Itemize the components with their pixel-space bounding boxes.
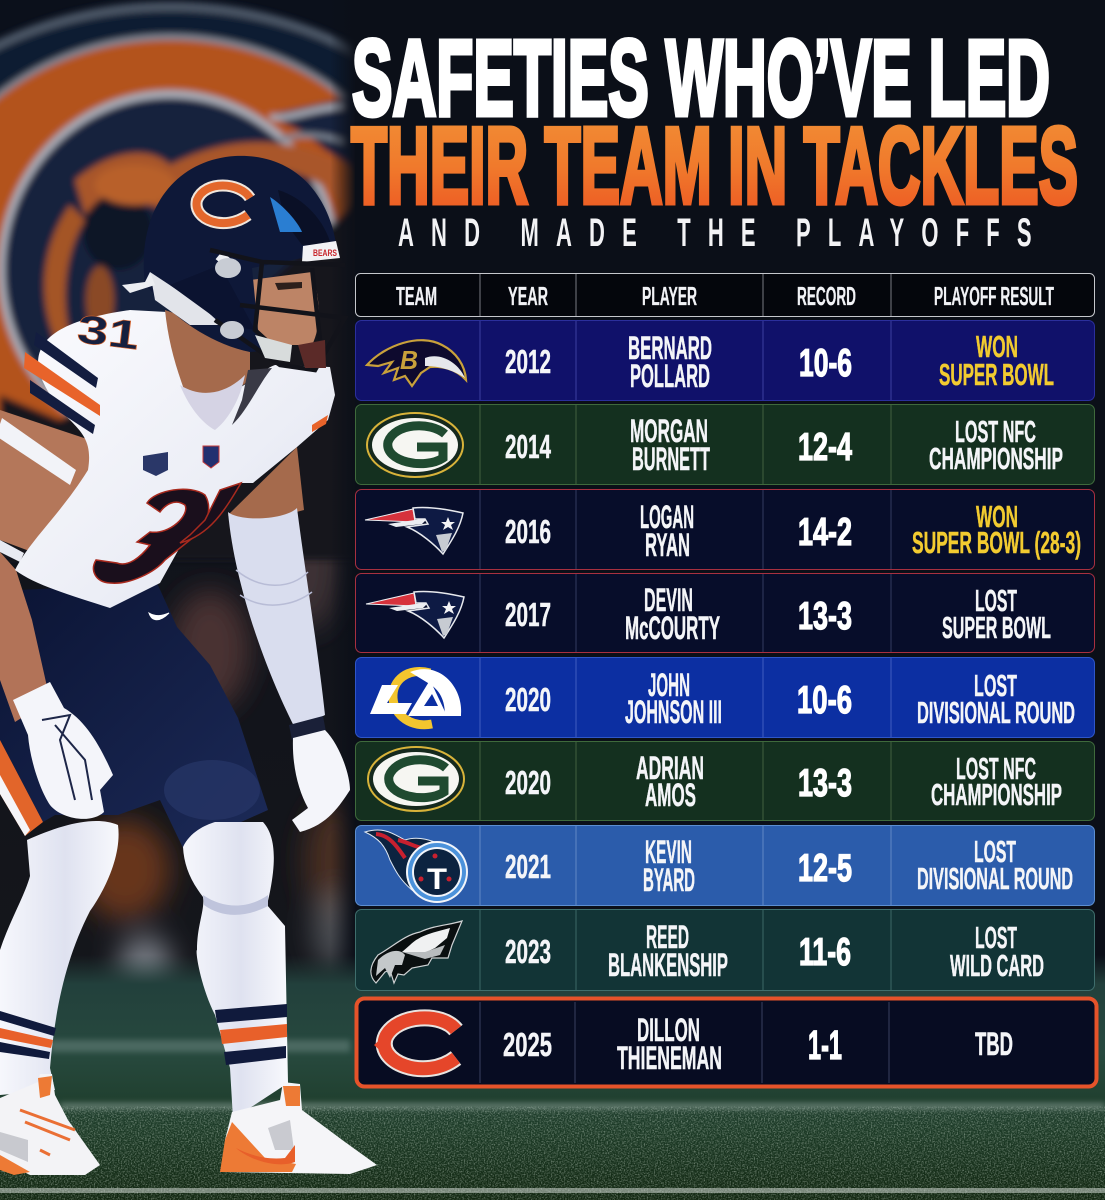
row: Titans 2021: 2021 bbox=[505, 848, 551, 885]
table header: YEAR bbox=[508, 281, 548, 311]
upper arm skin bbox=[0, 410, 92, 555]
icon: Packers logo bbox=[367, 413, 463, 477]
row: Eagles 2023: 11-6 bbox=[799, 931, 851, 974]
playoff result bbox=[950, 920, 1044, 983]
player: Bears safety number 31 bbox=[0, 156, 377, 1175]
playoff result bbox=[929, 414, 1063, 476]
row: Rams 2020 bbox=[356, 658, 1094, 738]
icon: Rams logo bbox=[370, 669, 461, 725]
background: blurred bears logo bbox=[0, 0, 505, 560]
right knee and sock bbox=[183, 822, 288, 1119]
row: Packers 2020 bbox=[356, 742, 1094, 820]
icon: Ravens logo bbox=[367, 340, 466, 386]
row: Titans 2021: 12-5 bbox=[798, 847, 852, 890]
table header bbox=[356, 274, 1094, 316]
playoff result: WON bbox=[976, 329, 1018, 364]
row: Patriots 2016 bbox=[356, 490, 1094, 570]
player name: JOHNSON III bbox=[625, 694, 722, 730]
row: Packers 2014: 2014 bbox=[505, 428, 551, 465]
pants side stripe bbox=[0, 740, 43, 836]
row: Rams 2020: 2020 bbox=[505, 681, 551, 718]
row: Patriots 2016: LOGAN bbox=[640, 499, 694, 535]
BEARS visor tag: BEARS bbox=[313, 248, 337, 258]
fade behind title and table bbox=[330, 0, 356, 985]
icon: Packers logo bbox=[368, 747, 464, 811]
subtitle: AND MADE THE PLAYOFFS bbox=[398, 210, 1032, 255]
table header: PLAYER bbox=[642, 281, 697, 311]
BEARS visor tag bbox=[302, 241, 340, 262]
sleeve stripes bbox=[34, 332, 98, 388]
right cleat bbox=[222, 1082, 377, 1174]
playoff result bbox=[942, 583, 1051, 645]
playoff result: LOST bbox=[975, 583, 1017, 618]
left knee and sock bbox=[0, 821, 119, 1095]
row: Ravens 2012: 10-6 bbox=[799, 342, 852, 385]
NFL shield badge bbox=[203, 446, 219, 468]
player name: AMOS bbox=[645, 777, 696, 813]
row: Eagles 2023 bbox=[356, 910, 1094, 990]
player name bbox=[643, 834, 695, 898]
wrist band bbox=[0, 540, 24, 562]
helmet shell bbox=[144, 156, 336, 352]
shoulder number: 31 bbox=[75, 307, 142, 358]
row: Titans 2021: BYARD bbox=[643, 862, 695, 898]
shoulder number behind mask bbox=[298, 340, 326, 368]
pants swoosh bbox=[149, 613, 169, 620]
facemask bbox=[210, 250, 345, 370]
chest number bbox=[94, 483, 241, 583]
right wrist band bbox=[289, 716, 326, 740]
row: Packers 2020: 13-3 bbox=[798, 762, 852, 805]
bear fur bbox=[75, 142, 340, 215]
undershirt bbox=[180, 375, 245, 430]
player name bbox=[630, 413, 710, 477]
playoff result bbox=[917, 834, 1073, 896]
playoff result: LOST bbox=[974, 834, 1016, 869]
player name bbox=[608, 919, 728, 983]
table header: TEAM bbox=[396, 281, 437, 311]
helmet jaw bbox=[170, 265, 255, 330]
playoff result: LOST bbox=[974, 668, 1017, 703]
player name: BERNARD bbox=[628, 330, 712, 366]
icon: Patriots logo bbox=[365, 507, 463, 554]
player name: REED bbox=[646, 919, 689, 955]
row: Titans 2021 bbox=[356, 826, 1094, 906]
neck bbox=[165, 310, 250, 400]
playoff result bbox=[939, 329, 1054, 392]
player name bbox=[636, 750, 704, 813]
football field turf bbox=[0, 955, 1105, 1200]
player name bbox=[628, 330, 712, 394]
player name: KEVIN bbox=[645, 834, 692, 870]
player name: BURNETT bbox=[632, 441, 710, 477]
forearm skin bbox=[0, 552, 50, 722]
player name bbox=[617, 1012, 722, 1076]
player name: DEVIN bbox=[644, 582, 693, 618]
ear strap bbox=[122, 272, 155, 293]
left glove bbox=[13, 682, 113, 819]
chin strap bbox=[255, 335, 292, 362]
left cleat bbox=[0, 1074, 100, 1175]
table header: RECORD bbox=[797, 281, 856, 311]
face bbox=[245, 272, 319, 345]
playoff result bbox=[931, 751, 1062, 812]
jersey bbox=[15, 310, 335, 608]
row: Packers 2014: 12-4 bbox=[798, 426, 852, 469]
row: Ravens 2012: 2012 bbox=[505, 343, 551, 380]
playoff result bbox=[912, 499, 1081, 560]
right glove bbox=[292, 730, 350, 832]
right sleeve stripe bbox=[312, 415, 328, 432]
helmet side detail bbox=[150, 272, 222, 325]
icon: Eagles logo bbox=[371, 921, 462, 983]
player name: THIENEMAN bbox=[617, 1040, 722, 1076]
icon: Titans logo: T bbox=[427, 863, 447, 896]
row: Patriots 2016: 14-2 bbox=[798, 511, 852, 554]
row: Bears 2025 highlighted: 1-1 bbox=[808, 1022, 842, 1068]
lower logo hidden in crowd bbox=[0, 200, 360, 560]
bicep band bbox=[0, 418, 76, 485]
row: Patriots 2016: 2016 bbox=[505, 513, 551, 550]
icon: Ravens logo: B bbox=[400, 345, 418, 375]
player name: JOHN bbox=[648, 667, 690, 703]
row: Patriots 2017: 2017 bbox=[505, 596, 551, 633]
icon: Bears logo bbox=[374, 1018, 456, 1069]
icon: Titans logo bbox=[365, 830, 468, 903]
row: Bears 2025 highlighted: 2025 bbox=[503, 1026, 552, 1063]
title bbox=[351, 17, 1078, 255]
row: Patriots 2017 bbox=[356, 574, 1094, 652]
row: Packers 2020: 2020 bbox=[505, 764, 551, 801]
row: Eagles 2023: 2023 bbox=[505, 933, 551, 970]
far arm skin bbox=[228, 447, 304, 528]
helmet C logo bbox=[196, 186, 250, 223]
row: Bears 2025 highlighted bbox=[356, 998, 1096, 1086]
player name: BLANKENSHIP bbox=[608, 947, 728, 983]
player name bbox=[625, 667, 722, 730]
playoff result: WON bbox=[976, 499, 1018, 534]
C notch bbox=[270, 95, 360, 170]
row: Ravens 2012 bbox=[356, 320, 1094, 400]
row: Rams 2020: 10-6 bbox=[797, 679, 852, 722]
arm sleeve bbox=[228, 508, 325, 730]
icon: Patriots logo bbox=[366, 591, 464, 638]
player name: McCOURTY bbox=[625, 610, 720, 646]
row: Patriots 2017: 13-3 bbox=[798, 595, 852, 638]
player name: RYAN bbox=[645, 527, 690, 563]
row: Packers 2014 bbox=[356, 404, 1094, 484]
playoff result: LOST bbox=[975, 920, 1017, 955]
player name: DILLON bbox=[637, 1012, 700, 1048]
captain patch bbox=[143, 452, 168, 476]
pants bbox=[0, 583, 268, 848]
playoff result: TBD bbox=[975, 1026, 1013, 1062]
playoff result bbox=[917, 668, 1075, 730]
player name: ADRIAN bbox=[636, 750, 704, 786]
player name: POLLARD bbox=[630, 358, 710, 394]
player name bbox=[640, 499, 694, 563]
player name bbox=[625, 582, 720, 646]
player name: MORGAN bbox=[630, 413, 708, 449]
